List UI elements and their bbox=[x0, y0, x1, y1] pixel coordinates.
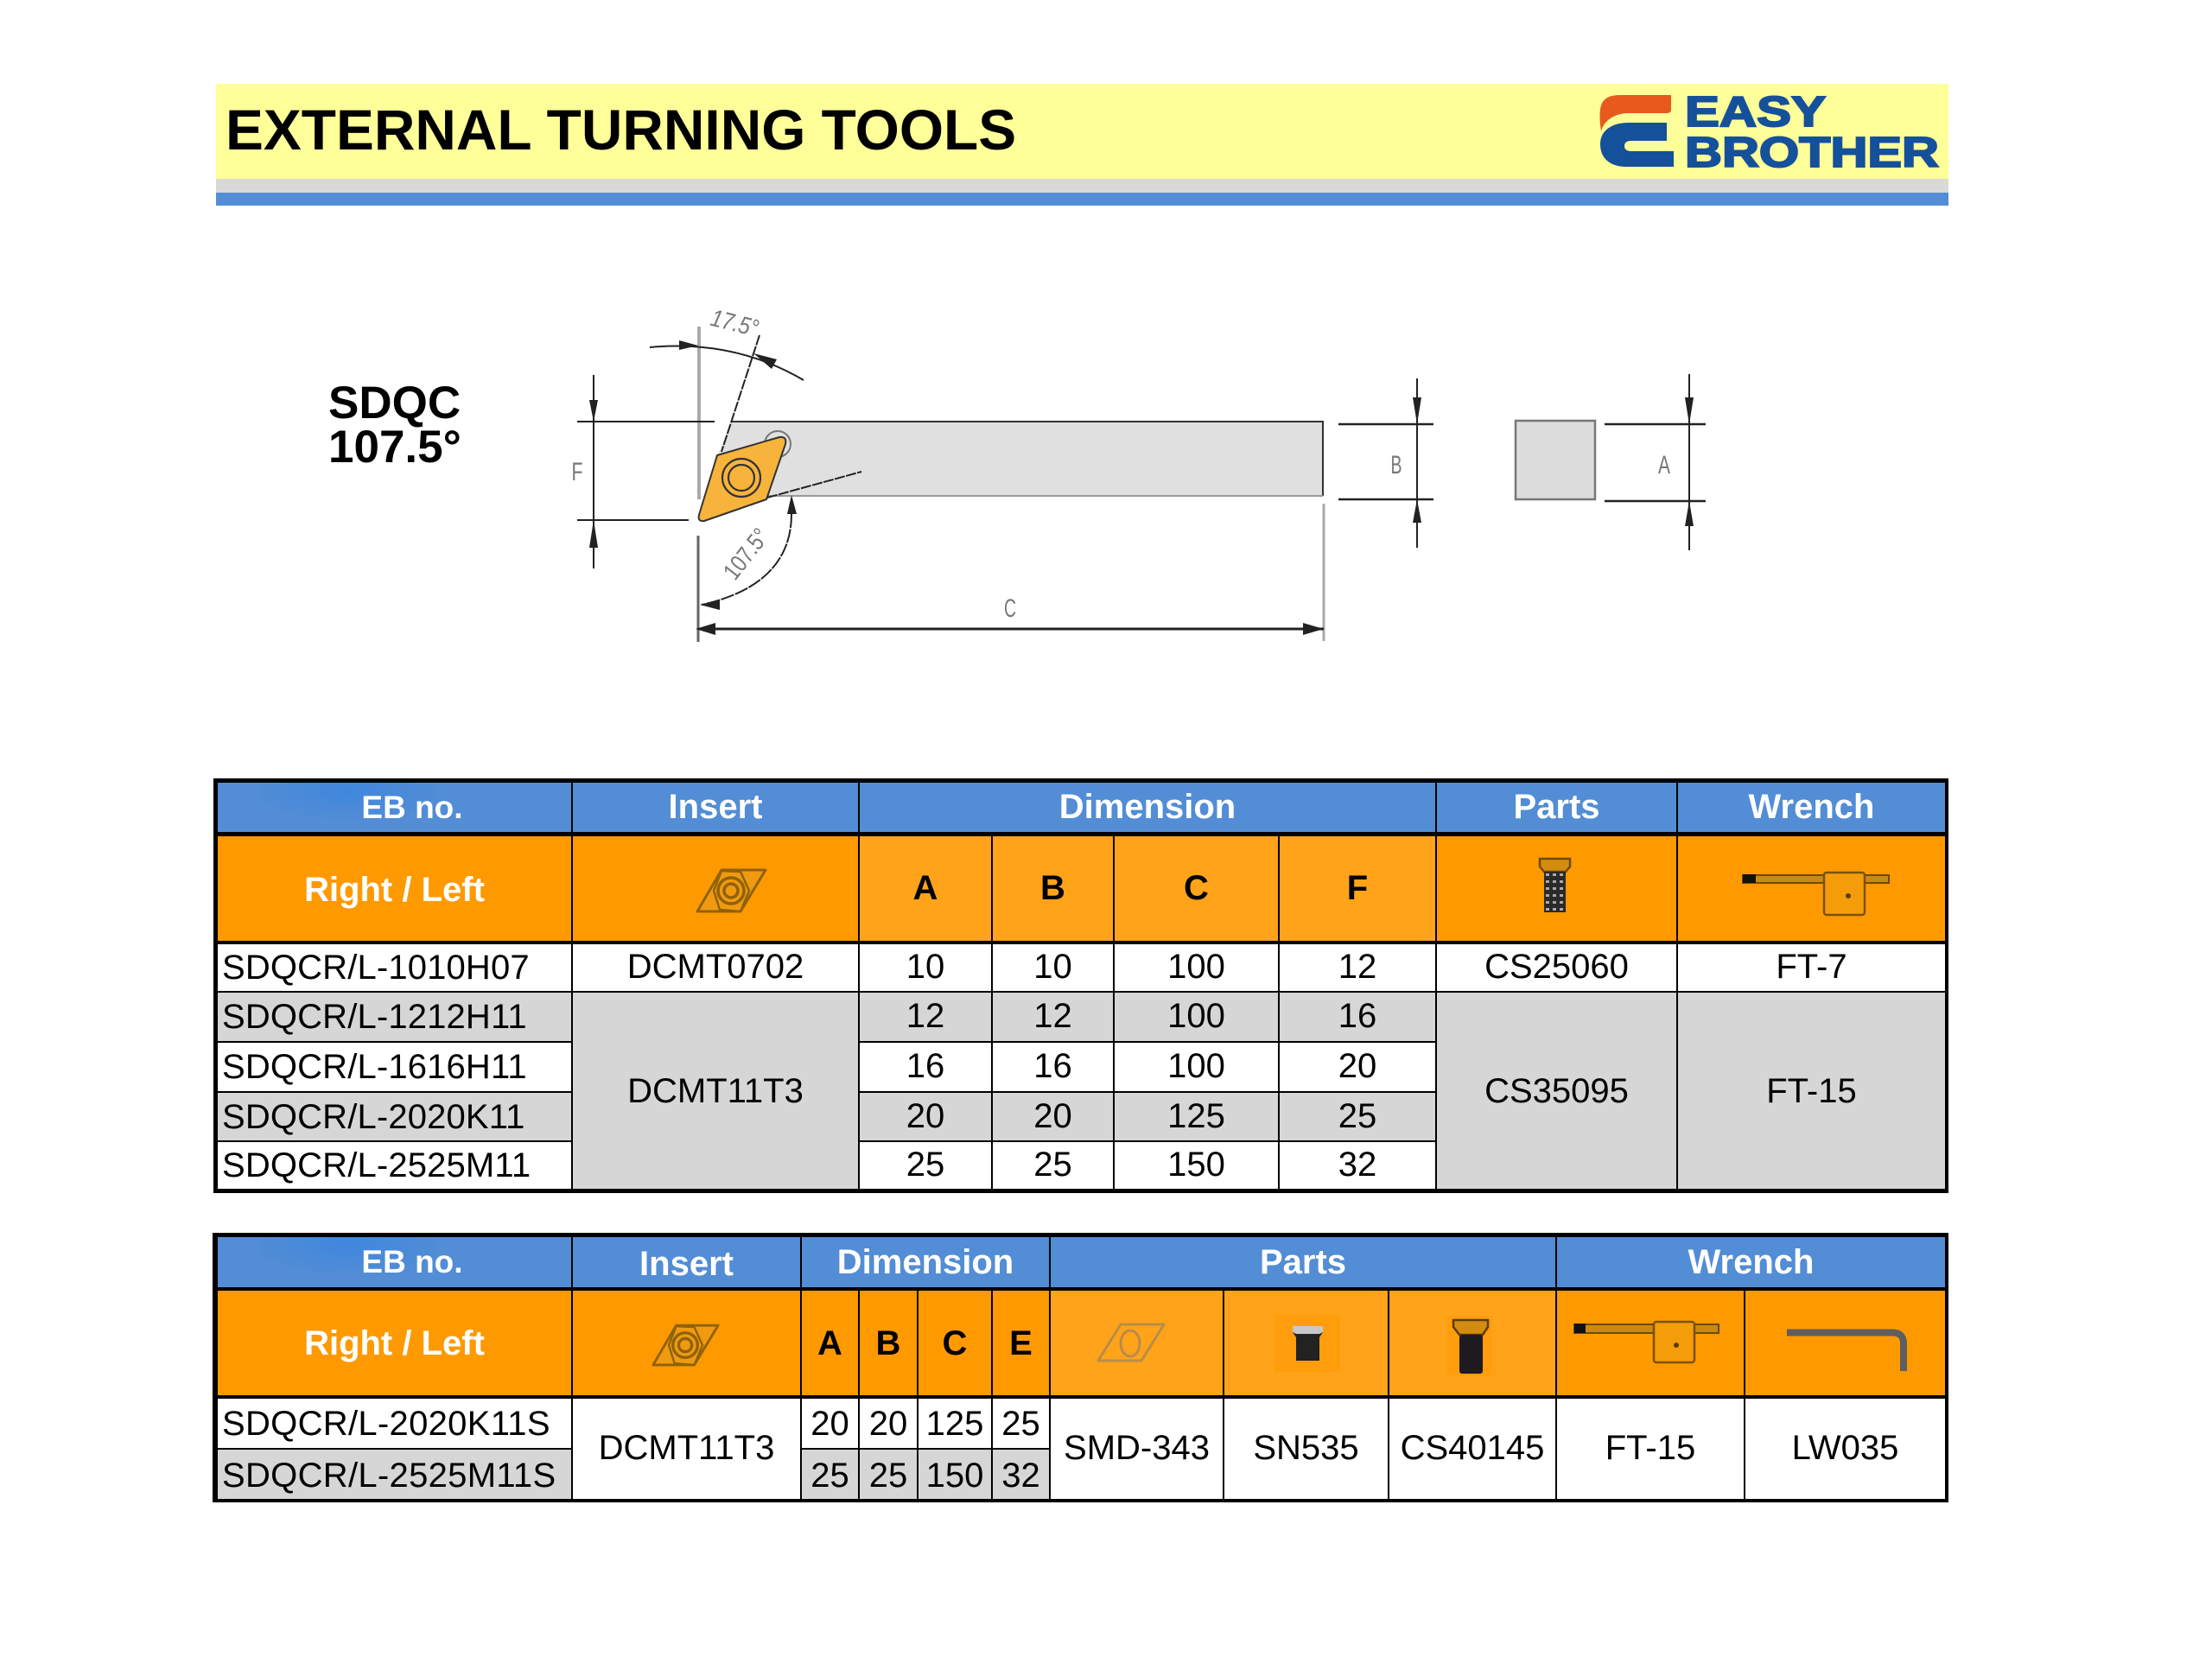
table 1 blue header row bbox=[218, 783, 1945, 832]
table 1 data row 3: 16 bbox=[906, 1047, 944, 1085]
merged hex key cell bbox=[1745, 1399, 1945, 1499]
merged hex key cell: LW035 bbox=[1792, 1429, 1898, 1467]
icon: insert bbox=[652, 1324, 720, 1367]
dimension letters bbox=[572, 304, 1670, 623]
blue stripe bbox=[216, 193, 1948, 206]
dimension letters: C bbox=[1004, 594, 1016, 623]
table 1 data row 1: 10 bbox=[1033, 948, 1072, 986]
table 1 data row 2: 16 bbox=[1338, 997, 1376, 1035]
table 1 orange sub-header row: B bbox=[1040, 869, 1065, 907]
tool model label: SDQC bbox=[328, 378, 461, 429]
table 2 data row 2: 25 bbox=[810, 1457, 849, 1495]
table 2 data row 2: 32 bbox=[1001, 1457, 1040, 1495]
table 1 data row 5 bbox=[218, 1142, 1435, 1189]
section square bbox=[1516, 421, 1595, 499]
table 2 blue header row: Insert bbox=[639, 1245, 734, 1283]
table 1 data row 3: 100 bbox=[1167, 1047, 1225, 1085]
spec table 2 bbox=[213, 1233, 1948, 1502]
table 1 data row 1: 10 bbox=[906, 948, 944, 986]
table 1 data row 4 bbox=[218, 1093, 1435, 1140]
table 2 orange sub-header row: B bbox=[876, 1324, 900, 1362]
dimension letters: F bbox=[572, 458, 582, 486]
table 1 data row 4: 20 bbox=[906, 1097, 944, 1135]
table 1 blue header row: Wrench bbox=[1749, 788, 1874, 826]
table 2 blue header row: EB no. bbox=[361, 1244, 463, 1279]
merged insert cell: DCMT11T3 bbox=[627, 1072, 804, 1110]
table 1 orange sub-header row: A bbox=[913, 869, 938, 907]
table 2 data row 2 bbox=[218, 1450, 1049, 1499]
merged parts cell: CS35095 bbox=[1484, 1072, 1629, 1110]
title: EXTERNAL TURNING TOOLS bbox=[226, 98, 1016, 162]
reference lines bbox=[577, 327, 1706, 642]
table 1 data row 3: 20 bbox=[1338, 1047, 1376, 1085]
table 1 blue header row: Insert bbox=[669, 788, 762, 826]
table 1 data row 3 bbox=[218, 1043, 1435, 1091]
icon: shim pin bbox=[1274, 1315, 1340, 1372]
merged wrench cell: FT-15 bbox=[1766, 1072, 1857, 1110]
table 1 data row 4: 20 bbox=[1033, 1097, 1072, 1135]
table 2 blue header row: Parts bbox=[1260, 1243, 1346, 1281]
table 1 data row 5: SDQCR/L-2525M11 bbox=[222, 1146, 531, 1184]
table 1 orange sub-header row: F bbox=[1347, 869, 1368, 907]
merged screw cell bbox=[1389, 1399, 1555, 1499]
merged insert cell bbox=[573, 993, 858, 1189]
logo: Easy Brother: EASY bbox=[1685, 89, 1826, 136]
table 1 data row 3: SDQCR/L-1616H11 bbox=[222, 1048, 527, 1086]
table 2 data row 1: 125 bbox=[926, 1405, 983, 1443]
table 1 orange sub-header row: C bbox=[1184, 869, 1209, 907]
table 1 data row 4: 25 bbox=[1338, 1097, 1376, 1135]
table 1 orange sub-header row: Right / Left bbox=[304, 871, 485, 909]
tool model label bbox=[328, 378, 461, 473]
merged wrench cell bbox=[1678, 993, 1945, 1189]
table 1 data row 5: 25 bbox=[1033, 1146, 1072, 1184]
table 1 data row 1: FT-7 bbox=[1776, 948, 1847, 986]
tool shank bbox=[717, 422, 1323, 496]
table 1 data row 5: 150 bbox=[1167, 1146, 1225, 1184]
table 2 blue header row: Wrench bbox=[1688, 1243, 1814, 1281]
table 2 data row 1: 20 bbox=[810, 1405, 849, 1443]
header band bbox=[216, 84, 1948, 206]
icon: T wrench bbox=[1573, 1320, 1719, 1363]
table 1 data row 2: 12 bbox=[1033, 997, 1072, 1035]
dimension letters: A bbox=[1658, 451, 1670, 479]
gray stripe bbox=[216, 179, 1948, 193]
table 2 data row 1: SDQCR/L-2020K11S bbox=[222, 1405, 550, 1443]
icon: T wrench bbox=[1742, 871, 1890, 916]
table 1 orange sub-header row bbox=[218, 836, 1945, 941]
table 2 data row 2: 150 bbox=[926, 1457, 983, 1495]
table 2 data row 1 bbox=[218, 1399, 1049, 1448]
table 1 data row 1: DCMT0702 bbox=[627, 948, 804, 986]
table 2 orange sub-header row: A bbox=[817, 1324, 842, 1362]
table 1 data row 2: SDQCR/L-1212H11 bbox=[222, 998, 527, 1036]
merged shim cell: SMD-343 bbox=[1064, 1429, 1210, 1467]
dimension letters: 107.5° bbox=[718, 524, 774, 585]
table 1 data row 5: 32 bbox=[1338, 1146, 1376, 1184]
table 1 data row 4: SDQCR/L-2020K11 bbox=[222, 1098, 525, 1136]
table 1 data row 3: 16 bbox=[1033, 1047, 1072, 1085]
merged parts cell bbox=[1437, 993, 1676, 1189]
clamp circle bbox=[765, 431, 791, 457]
table 1 data row 2: 100 bbox=[1167, 997, 1225, 1035]
merged insert cell bbox=[573, 1399, 800, 1499]
table 1 data row 1 bbox=[218, 944, 1945, 991]
table 2 data row 2: 25 bbox=[869, 1457, 907, 1495]
logo: Easy Brother bbox=[1600, 89, 1940, 176]
icon: shim bbox=[1097, 1324, 1165, 1362]
table 1 data row 2 bbox=[218, 993, 1435, 1041]
table 1 data row 1: SDQCR/L-1010H07 bbox=[222, 949, 530, 987]
merged pin cell bbox=[1224, 1399, 1388, 1499]
table 1 blue header row: Dimension bbox=[1059, 788, 1236, 826]
table 1 blue header row: EB no. bbox=[361, 790, 463, 825]
table 1 data row 4: 125 bbox=[1167, 1097, 1225, 1135]
merged screw cell: CS40145 bbox=[1401, 1429, 1544, 1467]
icon: insert bbox=[696, 869, 767, 912]
table 2 orange sub-header row: Right / Left bbox=[304, 1324, 485, 1362]
icon: clamp screw bbox=[1447, 1316, 1492, 1375]
dimension letters: 17.5° bbox=[708, 304, 761, 342]
merged T wrench cell bbox=[1557, 1399, 1744, 1499]
table 2 data row 1: 25 bbox=[1001, 1405, 1040, 1443]
merged insert cell: DCMT11T3 bbox=[599, 1429, 774, 1467]
spec table 1 bbox=[213, 778, 1948, 1193]
dimension arrowheads bbox=[589, 340, 1694, 635]
table 1 data row 1: CS25060 bbox=[1484, 948, 1629, 986]
table 2 data row 2: SDQCR/L-2525M11S bbox=[222, 1457, 556, 1495]
table 2 orange sub-header row: C bbox=[943, 1324, 967, 1362]
table 2 blue header row bbox=[218, 1237, 1945, 1287]
table 1 blue header row: Parts bbox=[1513, 788, 1600, 826]
cutting insert bbox=[699, 437, 785, 521]
table 1 data row 2: 12 bbox=[906, 997, 944, 1035]
table 2 orange sub-header row bbox=[218, 1291, 1945, 1395]
dimension letters: B bbox=[1391, 451, 1402, 479]
logo: Easy Brother: BROTHER bbox=[1685, 130, 1939, 176]
table 2 orange sub-header row: E bbox=[1009, 1324, 1033, 1362]
tool model label: 107.5° bbox=[328, 422, 461, 473]
merged pin cell: SN535 bbox=[1253, 1429, 1359, 1467]
icon: screw bbox=[1538, 857, 1571, 912]
table 1 data row 5: 25 bbox=[906, 1146, 944, 1184]
table 1 data row 1: 100 bbox=[1167, 948, 1225, 986]
table 2 blue header row: Dimension bbox=[837, 1243, 1014, 1281]
merged shim cell bbox=[1051, 1399, 1223, 1499]
table 1 data row 1: 12 bbox=[1338, 948, 1376, 986]
icon: L hex key bbox=[1787, 1329, 1907, 1371]
merged T wrench cell: FT-15 bbox=[1605, 1429, 1695, 1467]
table 2 data row 1: 20 bbox=[869, 1405, 907, 1443]
